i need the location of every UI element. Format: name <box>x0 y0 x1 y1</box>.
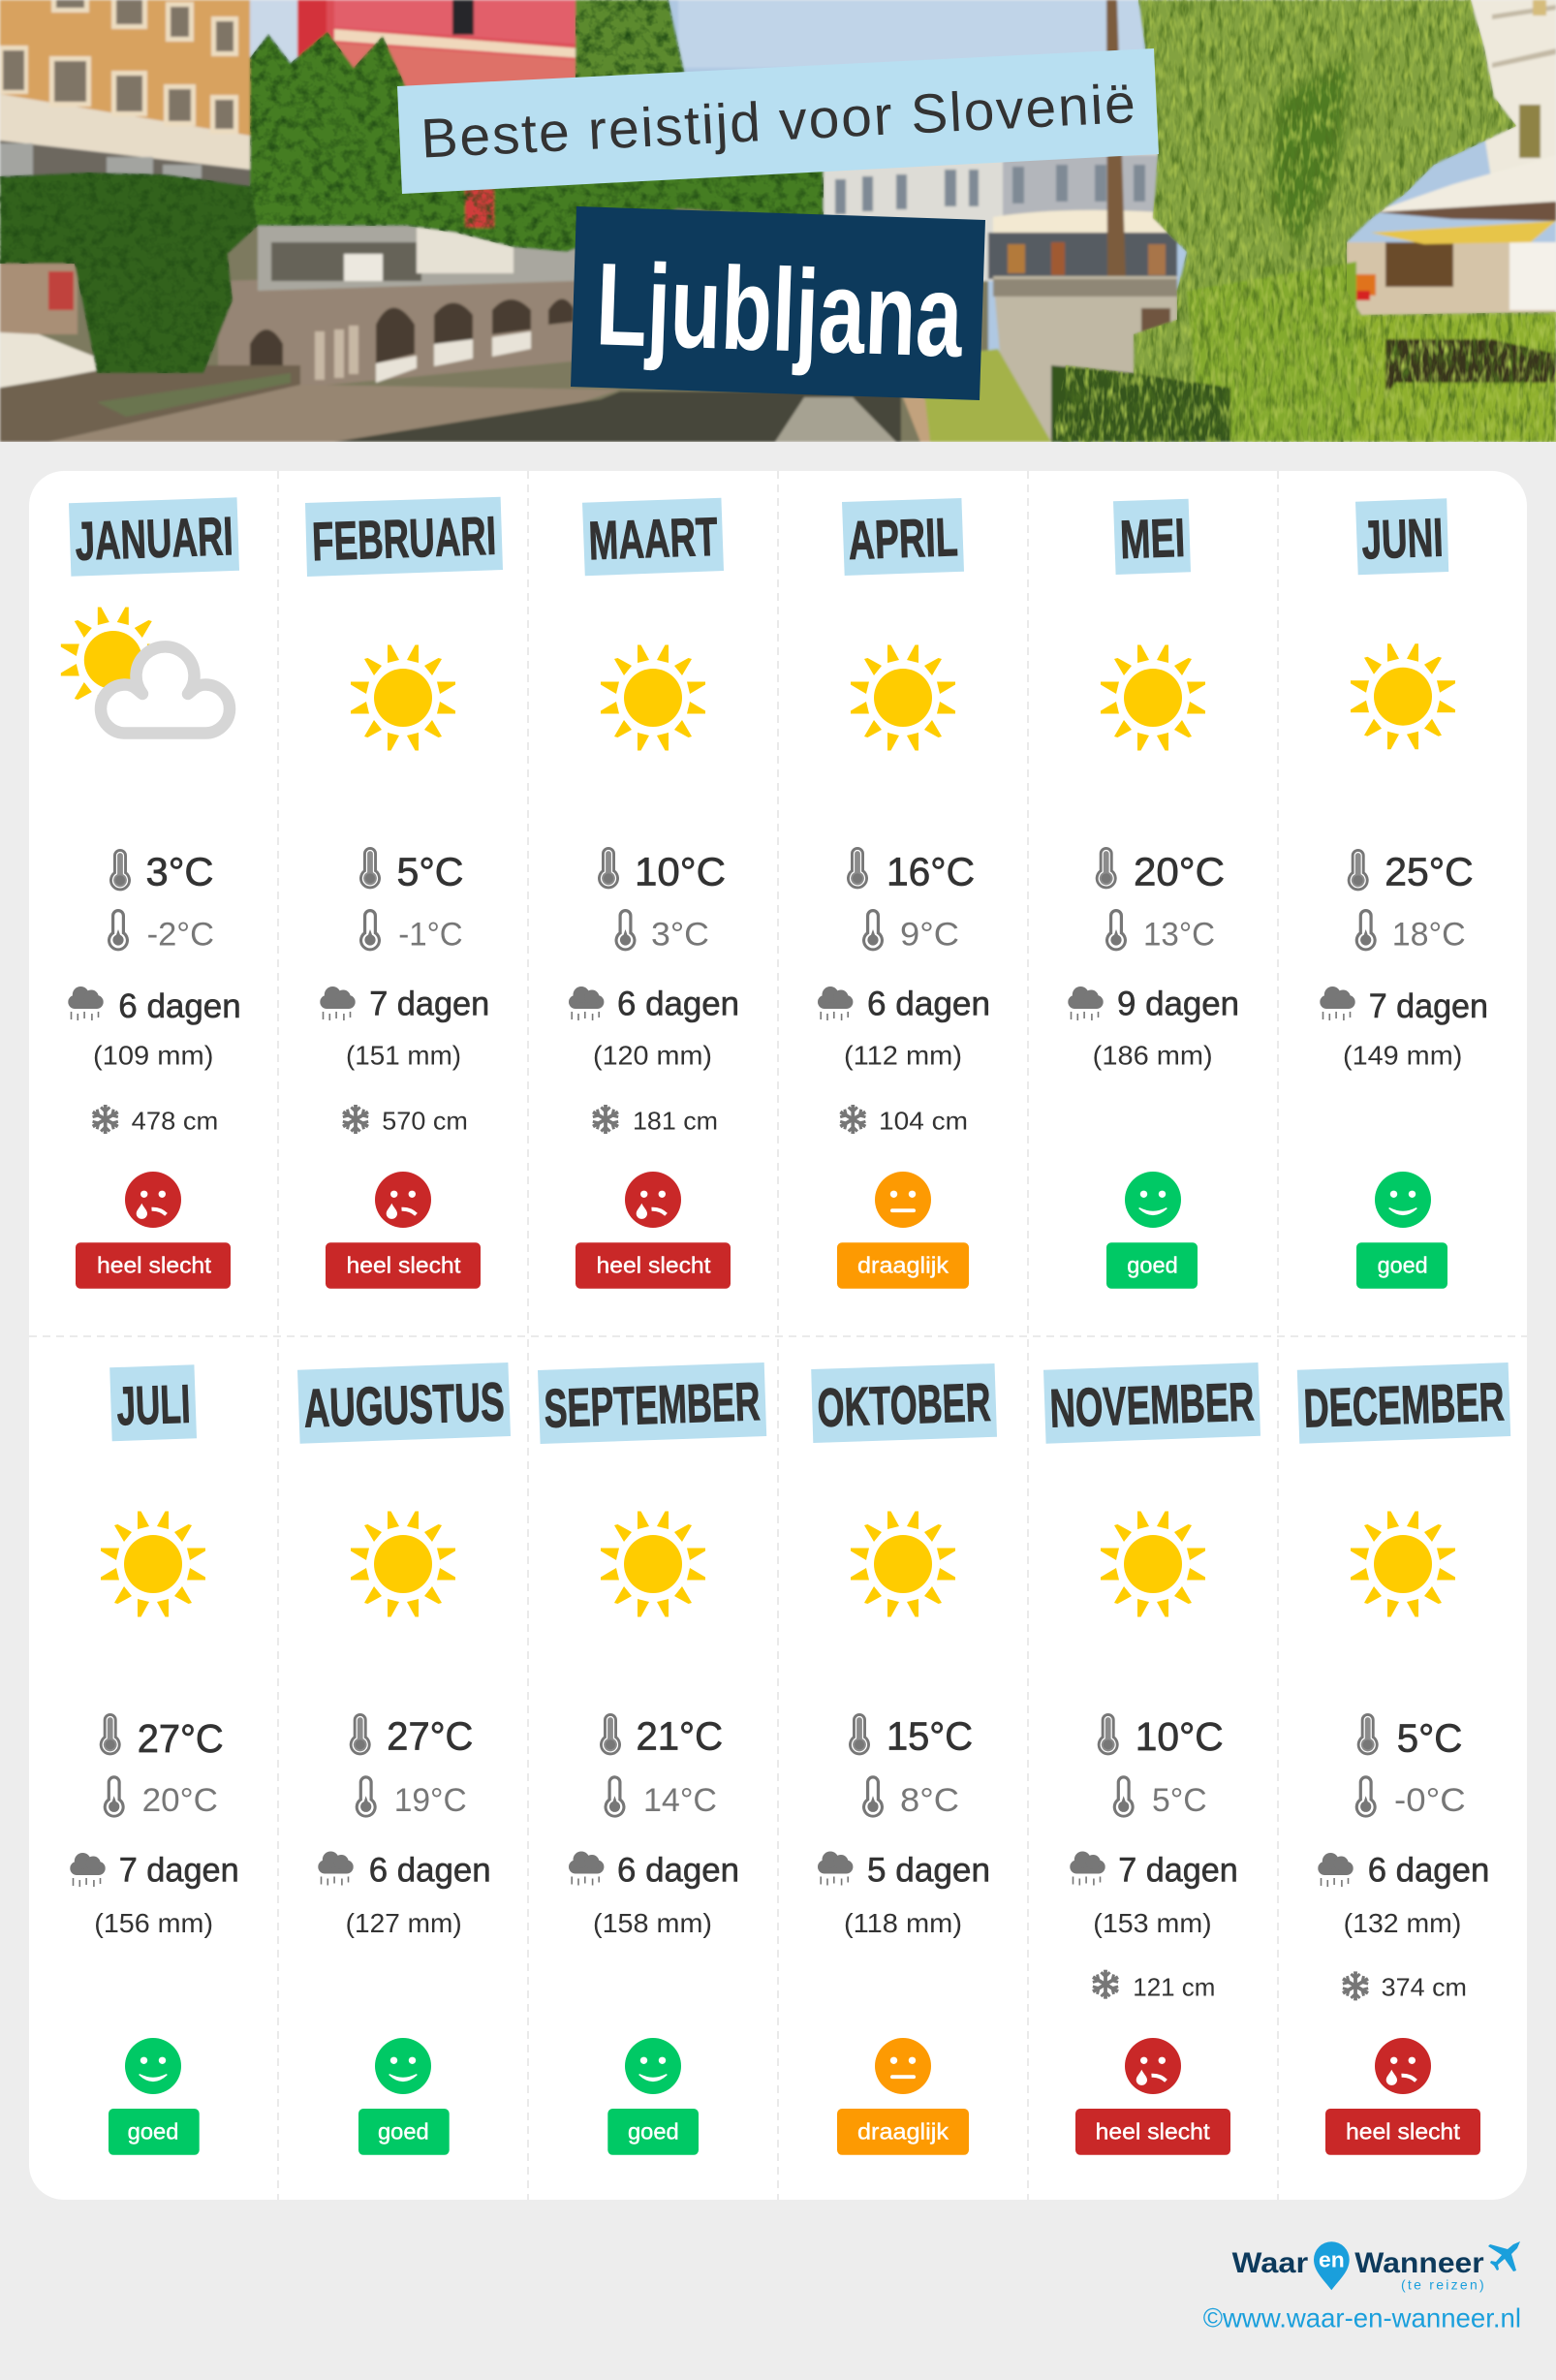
rainfall: (186 mm) <box>1093 1041 1213 1071</box>
high temperature: 21°C <box>636 1713 723 1758</box>
rating: heel slecht <box>576 1242 731 1289</box>
low temperature <box>614 909 709 954</box>
logo: Waar en Wanneer: Waar <box>1232 2247 1309 2279</box>
rainfall: (149 mm) <box>1343 1041 1462 1071</box>
rainfall: (118 mm) <box>844 1908 962 1938</box>
high temperature <box>109 849 213 893</box>
rain days: 6 dagen <box>369 1851 491 1889</box>
month label: augustus <box>297 1362 511 1444</box>
rating: goed <box>607 2109 699 2155</box>
rating: draaglijk <box>837 2109 969 2155</box>
icon: sun <box>1351 643 1455 749</box>
rating: goed: goed <box>1127 1252 1178 1277</box>
panel: februari <box>305 497 503 1289</box>
icon: crying face <box>1375 2038 1431 2094</box>
rainfall: (112 mm) <box>844 1041 962 1071</box>
low temperature <box>862 1775 959 1819</box>
low temperature <box>1113 1775 1207 1819</box>
icon: map pin: en <box>1319 2247 1345 2271</box>
low temperature: 13°C <box>1143 917 1215 954</box>
high temperature: 5°C <box>1397 1715 1462 1760</box>
snowfall <box>341 1105 468 1135</box>
month label: april <box>842 498 964 576</box>
high temperature: 20°C <box>1134 849 1225 893</box>
icon: smiling face <box>1125 1172 1181 1228</box>
high temperature <box>1348 849 1474 893</box>
rainfall: (127 mm) <box>346 1908 462 1938</box>
month label: januari <box>69 497 239 577</box>
icon: neutral face <box>875 1172 931 1228</box>
icon: crying face <box>375 1172 431 1228</box>
high temperature: 25°C <box>1385 849 1474 893</box>
low temperature: 3°C <box>651 917 709 954</box>
low temperature <box>359 909 463 954</box>
rainfall: (120 mm) <box>593 1041 712 1071</box>
rating: heel slecht: heel slecht <box>597 1252 711 1277</box>
title banner: Beste reistijd voor Slovenië <box>397 48 1159 194</box>
rain days: 7 dagen <box>1118 1851 1238 1889</box>
rainfall: (151 mm) <box>346 1041 461 1071</box>
rating: goed <box>1106 1242 1198 1289</box>
rainfall: (153 mm) <box>1093 1908 1212 1938</box>
rating: heel slecht: heel slecht <box>97 1252 212 1277</box>
month label: juli <box>109 1364 197 1441</box>
panel: juli <box>70 1364 239 2155</box>
month label: juli: JULI <box>115 1373 192 1436</box>
high temperature <box>359 847 463 893</box>
high temperature <box>350 1713 473 1758</box>
rain days <box>1320 986 1488 1025</box>
rating: goed: goed <box>1378 1252 1428 1277</box>
low temperature <box>1355 909 1466 954</box>
snowfall <box>1091 1970 1215 2002</box>
low temperature <box>1355 1775 1466 1819</box>
icon: sun <box>851 1512 955 1616</box>
panel: november <box>1043 1362 1260 2155</box>
high temperature <box>1096 847 1225 893</box>
rain days: 7 dagen <box>119 1851 239 1889</box>
month label: november: NOVEMBER <box>1049 1370 1256 1439</box>
low temperature <box>108 909 214 954</box>
rating: goed <box>1356 1242 1447 1289</box>
panel: oktober <box>811 1363 997 2155</box>
snowfall: 570 cm <box>382 1106 468 1135</box>
month label: februari: FEBRUARI <box>311 505 497 572</box>
snowfall: 374 cm <box>1382 1973 1467 2002</box>
icon: sun behind cloud <box>61 607 230 733</box>
rain days: 5 dagen <box>867 1851 990 1889</box>
month label: februari <box>305 497 503 577</box>
low temperature: -1°C <box>398 917 463 954</box>
low temperature: -2°C <box>147 917 214 954</box>
high temperature: 5°C <box>397 849 463 893</box>
month label: augustus: AUGUSTUS <box>303 1370 506 1439</box>
copyright url: ©www.waar-en-wanneer.nl <box>1203 2303 1521 2333</box>
panel: juni <box>1320 498 1488 1289</box>
high temperature <box>100 1713 224 1761</box>
snowfall: 104 cm <box>879 1106 968 1135</box>
low temperature: 14°C <box>643 1782 717 1819</box>
month label: oktober <box>811 1363 997 1443</box>
city banner: Ljubljana <box>571 206 985 400</box>
rating: goed: goed <box>128 2119 178 2145</box>
header photo: Ljubljana riverside <box>0 0 1556 442</box>
icon: sun <box>1101 645 1205 750</box>
high temperature <box>600 1713 723 1758</box>
icon: smiling face <box>125 2038 181 2094</box>
logo: Waar en Wanneer <box>1232 2241 1520 2293</box>
icon: sun <box>1351 1512 1455 1616</box>
icon: sun <box>601 1512 705 1616</box>
logo: Waar en Wanneer: (te reizen) <box>1401 2277 1484 2293</box>
icon: sun <box>351 1512 455 1616</box>
rainfall: (132 mm) <box>1344 1908 1461 1938</box>
month label: september <box>538 1362 766 1444</box>
low temperature: 8°C <box>900 1782 959 1819</box>
icon: smiling face <box>625 2038 681 2094</box>
month label: maart: MAART <box>587 506 719 571</box>
month label: november <box>1043 1362 1260 1444</box>
icon: crying face <box>125 1172 181 1228</box>
high temperature: 27°C <box>138 1716 224 1761</box>
icon: sun <box>851 645 955 750</box>
icon: sun <box>101 1512 205 1616</box>
rain days: 6 dagen <box>617 985 739 1022</box>
icon: smiling face <box>1375 1172 1431 1228</box>
panel: augustus <box>297 1362 511 2155</box>
low temperature: 5°C <box>1152 1782 1207 1819</box>
rain days: 9 dagen <box>1117 985 1239 1022</box>
rating: heel slecht: heel slecht <box>347 1252 461 1277</box>
month label: juni <box>1355 498 1448 575</box>
month label: maart <box>582 498 724 576</box>
month label: mei <box>1113 499 1191 575</box>
low temperature <box>356 1775 467 1819</box>
rain days <box>68 986 241 1025</box>
month label: juni: JUNI <box>1360 507 1445 570</box>
low temperature: 18°C <box>1392 917 1466 954</box>
rainfall: (156 mm) <box>94 1908 213 1938</box>
snowfall <box>591 1105 718 1135</box>
snowfall: 121 cm <box>1133 1973 1215 2002</box>
snowfall <box>838 1105 968 1135</box>
rain days: 7 dagen <box>369 985 489 1022</box>
rating: draaglijk: draaglijk <box>857 2119 949 2145</box>
month label: april: APRIL <box>847 506 959 571</box>
low temperature <box>862 909 959 954</box>
icon: smiling face <box>375 2038 431 2094</box>
month label: september: SEPTEMBER <box>544 1370 762 1439</box>
snowfall: 181 cm <box>633 1106 718 1135</box>
rating: heel slecht <box>1325 2109 1480 2155</box>
icon: neutral face <box>875 2038 931 2094</box>
high temperature <box>849 1713 973 1758</box>
city banner: Ljubljana: Ljubljana <box>594 237 966 382</box>
rating: draaglijk <box>837 1242 969 1289</box>
low temperature <box>104 1775 218 1819</box>
low temperature <box>1105 909 1215 954</box>
low temperature: -0°C <box>1394 1782 1466 1819</box>
rain days <box>1070 1851 1238 1889</box>
icon: crying face <box>625 1172 681 1228</box>
rating: goed <box>358 2109 450 2155</box>
rating: goed <box>109 2109 200 2155</box>
rating: draaglijk: draaglijk <box>857 1252 949 1277</box>
rating: heel slecht <box>76 1242 231 1289</box>
rating: heel slecht: heel slecht <box>1096 2119 1210 2145</box>
icon: crying face <box>1125 2038 1181 2094</box>
snowfall <box>90 1105 218 1135</box>
icon: sun <box>351 645 455 750</box>
high temperature: 16°C <box>887 849 975 893</box>
rainfall: (158 mm) <box>593 1908 712 1938</box>
rating: goed: goed <box>628 2119 679 2145</box>
high temperature: 3°C <box>145 849 213 893</box>
low temperature: 20°C <box>142 1782 218 1819</box>
icon: airplane <box>1488 2241 1520 2271</box>
title banner: Beste reistijd voor Slovenië: Beste reistijd voor Slovenië <box>420 73 1136 171</box>
high temperature: 27°C <box>387 1713 473 1758</box>
rain days: 6 dagen <box>867 985 990 1022</box>
low temperature: 9°C <box>900 917 959 954</box>
logo: Waar en Wanneer: Wanneer <box>1354 2247 1484 2279</box>
high temperature <box>847 847 975 893</box>
panel: januari <box>61 497 241 1289</box>
high temperature: 10°C <box>635 849 726 893</box>
rating: heel slecht: heel slecht <box>1346 2119 1461 2145</box>
high temperature <box>1098 1713 1224 1759</box>
panel: april <box>818 498 990 1289</box>
rating: heel slecht <box>1075 2109 1230 2155</box>
rain days <box>320 985 489 1022</box>
icon: sun <box>601 645 705 750</box>
panel: maart <box>569 498 739 1289</box>
rain days: 6 dagen <box>118 987 241 1025</box>
rainfall: (109 mm) <box>93 1041 213 1071</box>
low temperature <box>605 1775 717 1819</box>
panel: climate table card <box>29 471 1527 2200</box>
high temperature: 10°C <box>1136 1714 1224 1759</box>
month label: januari: JANUARI <box>75 505 234 572</box>
high temperature: 15°C <box>887 1713 973 1758</box>
rain days: 6 dagen <box>617 1851 739 1889</box>
icon: map pin <box>1314 2241 1350 2290</box>
rating: heel slecht <box>326 1242 481 1289</box>
rating: goed: goed <box>378 2119 429 2145</box>
snowfall <box>1341 1971 1467 2002</box>
high temperature <box>598 847 726 893</box>
rain days: 6 dagen <box>1368 1851 1489 1889</box>
high temperature <box>1357 1713 1462 1760</box>
panel: december <box>1297 1362 1510 2155</box>
rain days: 7 dagen <box>1369 987 1488 1025</box>
icon: sun <box>1101 1512 1205 1616</box>
low temperature: 19°C <box>394 1782 467 1819</box>
panel: mei <box>1068 499 1239 1289</box>
snowfall: 478 cm <box>132 1106 218 1135</box>
month label: mei: MEI <box>1119 507 1186 570</box>
panel: september <box>538 1362 766 2155</box>
month label: oktober: OKTOBER <box>817 1371 992 1438</box>
